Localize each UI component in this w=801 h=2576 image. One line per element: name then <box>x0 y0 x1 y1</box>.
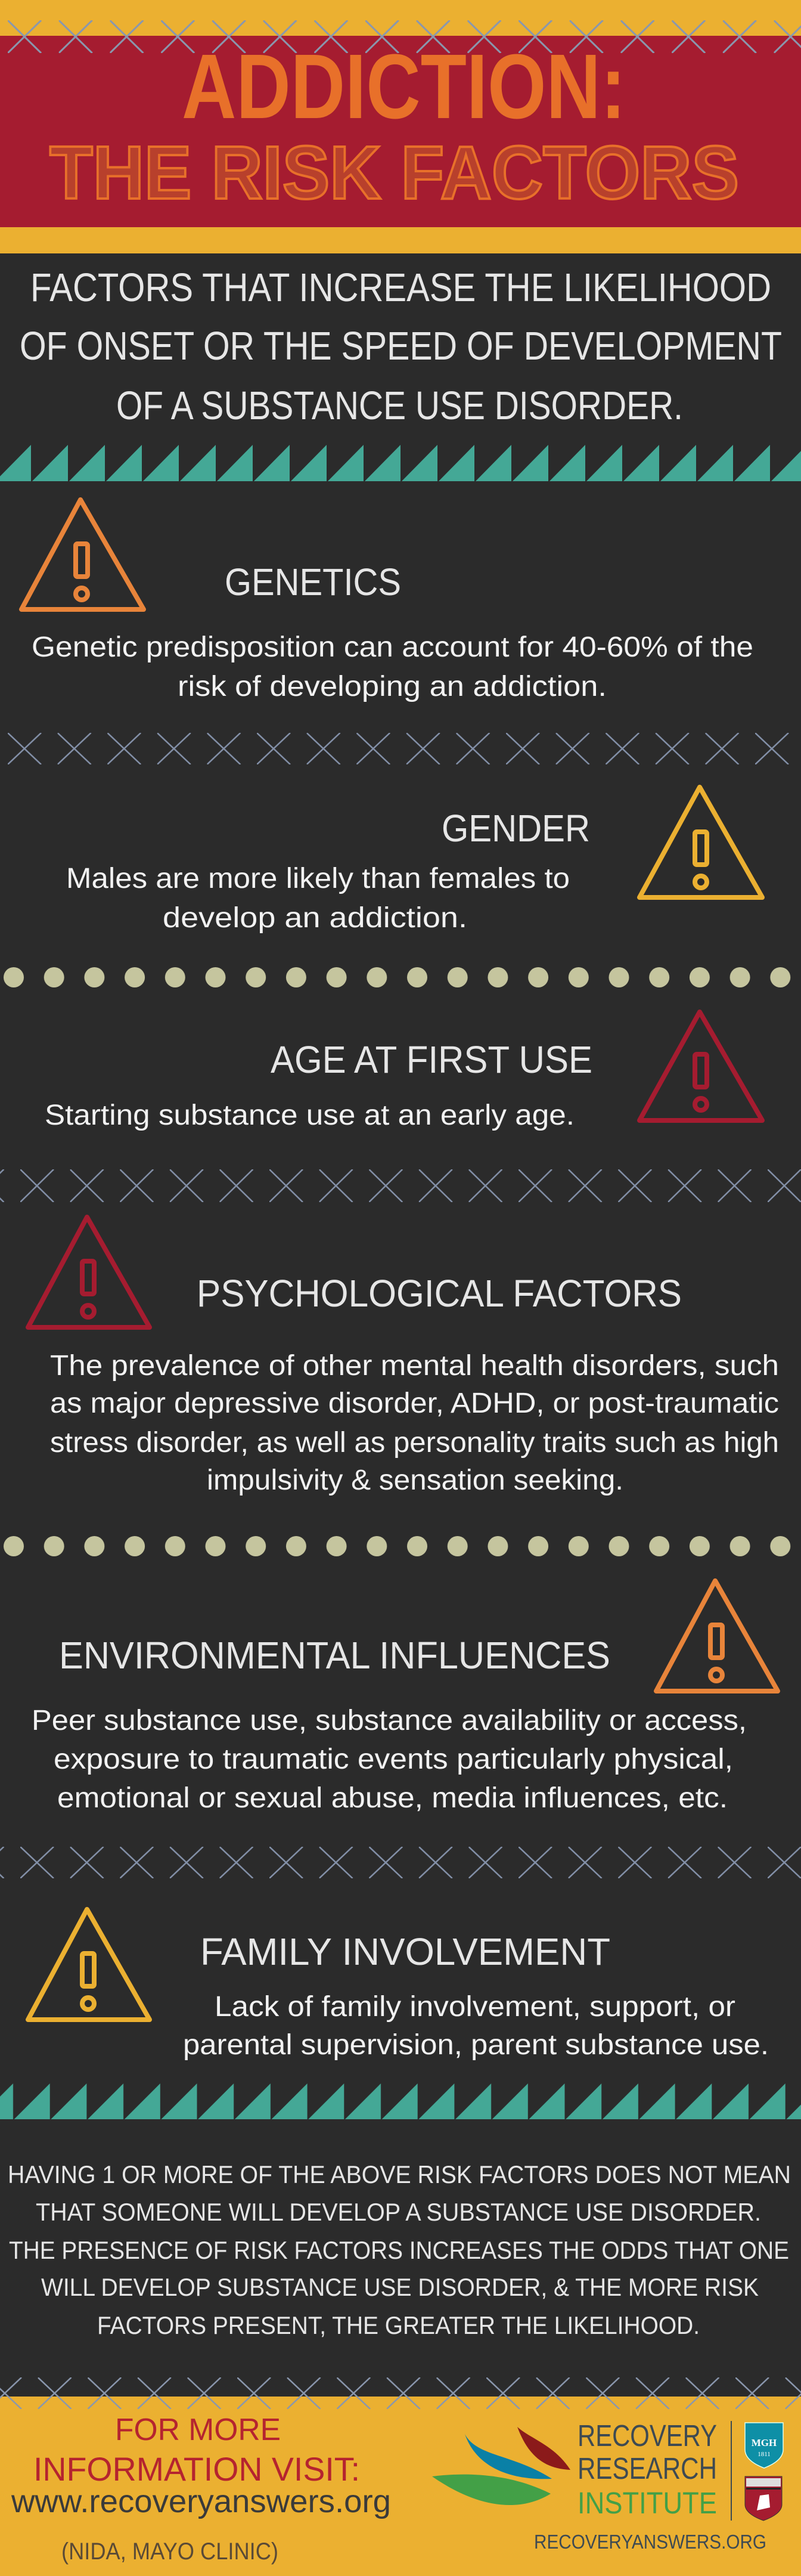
text: psychological body <box>50 1350 779 1496</box>
footer: more info <box>11 2413 391 2565</box>
text: genetics body: Genetic predisposition can account for 40-60% of the <box>32 631 753 663</box>
icon: MGH shield: MGH <box>752 2437 777 2448</box>
heading: gender: GENDER <box>442 807 590 850</box>
closing note: FACTORS PRESENT, THE GREATER THE LIKELIHOOD. <box>97 2311 700 2339</box>
text: psychological body: The prevalence of other mental health disorders, such <box>50 1350 779 1382</box>
dot divider <box>0 1534 801 1558</box>
icon: MGH shield: 1811 <box>757 2451 771 2458</box>
text: genetics body <box>32 631 753 702</box>
icon: MGH shield <box>745 2423 783 2468</box>
icon: Harvard shield <box>745 2476 782 2521</box>
subtitle <box>20 265 782 428</box>
logo: recovery research institute: RECOVERYANSWERS.ORG <box>534 2531 766 2553</box>
panel: gender <box>66 787 762 934</box>
text: environmental body: Peer substance use, substance availability or access, <box>32 1705 747 1736</box>
text: psychological body: as major depressive disorder, ADHD, or post-traumatic <box>50 1388 779 1419</box>
text: family body <box>183 1991 769 2061</box>
logo: recovery research institute: RESEARCH <box>578 2451 717 2485</box>
text: family body: parental supervision, parent substance use. <box>183 2029 769 2061</box>
icon: yellow warning triangle <box>28 1909 150 2020</box>
text: psychological body: impulsivity & sensation seeking. <box>207 1465 623 1496</box>
dot divider <box>0 965 801 989</box>
heading: family involvement: FAMILY INVOLVEMENT <box>200 1930 610 1973</box>
header band <box>0 0 801 253</box>
subtitle: OF A SUBSTANCE USE DISORDER. <box>116 383 683 428</box>
text: genetics body: risk of developing an addiction. <box>178 671 607 702</box>
panel: family involvement <box>28 1909 769 2061</box>
panel: environmental influences <box>32 1581 778 1814</box>
x divider <box>0 1847 801 1878</box>
footer: more info: FOR MORE <box>115 2413 281 2447</box>
icon: yellow warning triangle <box>639 787 762 897</box>
logo: recovery research institute: RECOVERY <box>578 2419 717 2453</box>
closing note: THAT SOMEONE WILL DEVELOP A SUBSTANCE USE DISORDER. <box>36 2198 761 2226</box>
text: environmental body: exposure to traumatic events particularly physical, <box>54 1744 733 1775</box>
text: psychological body: stress disorder, as well as personality traits such as high <box>50 1427 779 1459</box>
text: environmental body: emotional or sexual abuse, media influences, etc. <box>57 1782 728 1814</box>
closing note: WILL DEVELOP SUBSTANCE USE DISORDER, & THE MORE RISK <box>41 2273 759 2301</box>
title: THE RISK FACTORS <box>49 131 739 215</box>
panel: genetics <box>21 500 753 702</box>
icon: red warning triangle <box>28 1217 150 1327</box>
teal sawtooth divider <box>0 2083 801 2119</box>
heading: age at first use: AGE AT FIRST USE <box>271 1038 592 1081</box>
heading: psychological factors: PSYCHOLOGICAL FACTORS <box>197 1272 682 1315</box>
panel: psychological factors <box>28 1217 779 1496</box>
text: gender body: develop an addiction. <box>163 902 467 934</box>
text: gender body <box>66 863 570 934</box>
title <box>49 35 739 215</box>
closing note <box>8 2160 791 2339</box>
icon: orange warning triangle <box>656 1581 778 1691</box>
panel: age at first use <box>45 1012 762 1131</box>
heading: genetics: GENETICS <box>225 561 401 603</box>
logo: recovery research institute <box>432 2419 783 2553</box>
teal sawtooth divider <box>0 445 801 481</box>
footer: more info: (NIDA, MAYO CLINIC) <box>61 2538 278 2565</box>
logo: recovery research institute: INSTITUTE <box>578 2486 717 2520</box>
heading: environmental influences: ENVIRONMENTAL INFLUENCES <box>59 1634 610 1677</box>
icon: orange warning triangle <box>21 500 144 609</box>
footer band <box>0 2377 801 2576</box>
footer: more info: INFORMATION VISIT: <box>33 2450 360 2488</box>
icon: red warning triangle <box>639 1012 762 1120</box>
footer: more info: www.recoveryanswers.org <box>11 2484 391 2519</box>
icon: leaves <box>432 2427 570 2505</box>
x divider <box>0 733 801 764</box>
text: age body: Starting substance use at an early age. <box>45 1100 575 1131</box>
text: gender body: Males are more likely than females to <box>66 863 570 894</box>
text: environmental body <box>32 1705 747 1814</box>
title: ADDICTION: <box>182 35 626 138</box>
text: family body: Lack of family involvement, support, or <box>215 1991 735 2023</box>
x divider <box>0 1169 801 1202</box>
